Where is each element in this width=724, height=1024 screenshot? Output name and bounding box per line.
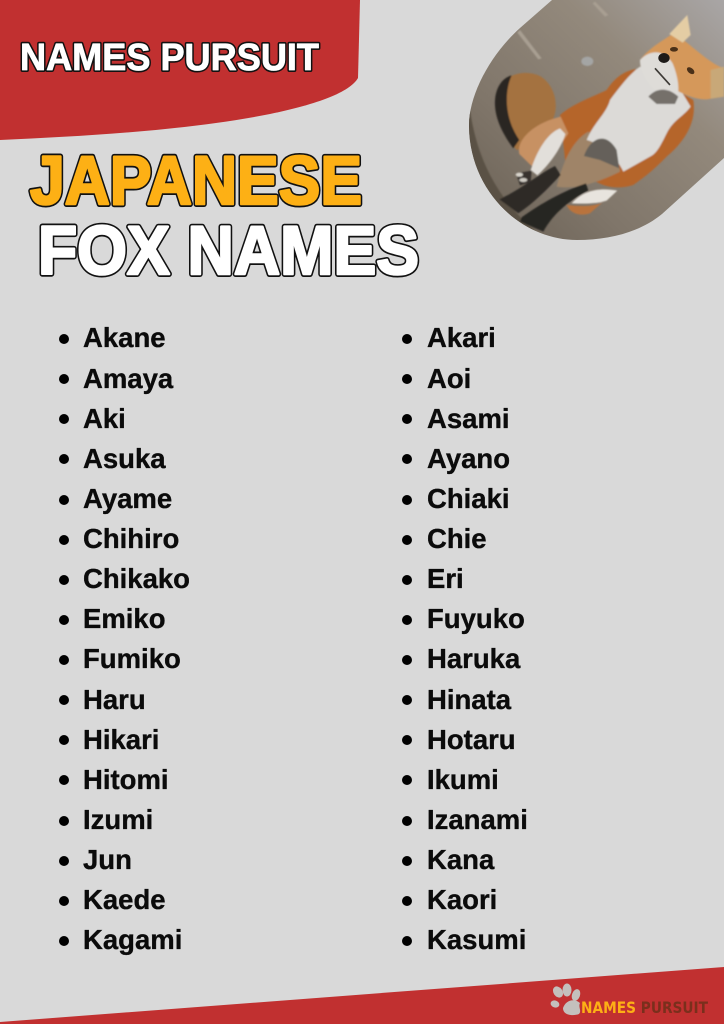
name list: left column: Ayame xyxy=(83,483,172,514)
bottom red band xyxy=(0,967,724,1024)
name list: left column: Amaya xyxy=(83,363,174,394)
name list: right column: Izanami xyxy=(427,804,528,835)
name list: right column: Ayano xyxy=(427,443,510,474)
name list: left column: Izumi xyxy=(83,804,153,835)
icon: paw logo xyxy=(550,984,582,1015)
title: Japanese: JAPANESE xyxy=(30,142,362,219)
name list: left column: Fumiko xyxy=(83,643,181,674)
name list: right column: Eri xyxy=(427,563,464,594)
name list: right column: Hotaru xyxy=(427,724,516,755)
name list: right column: Kaori xyxy=(427,884,497,915)
name list: right column: Haruka xyxy=(427,643,521,674)
name list: right column: Akari xyxy=(427,322,496,353)
name list: left column: Emiko xyxy=(83,603,166,634)
name list: right column: Chie xyxy=(427,523,487,554)
name list: left column: Asuka xyxy=(83,443,166,474)
name list: right column: Ikumi xyxy=(427,764,499,795)
name list: left column xyxy=(59,322,190,955)
name list: right column: Kasumi xyxy=(427,924,526,955)
name list: left column: Haru xyxy=(83,684,146,715)
name list: left column: Kagami xyxy=(83,924,182,955)
name list: right column: Asami xyxy=(427,403,510,434)
name list: left column: Hitomi xyxy=(83,764,169,795)
name list: right column: Kana xyxy=(427,844,495,875)
top-left red banner xyxy=(0,0,360,140)
name list: right column xyxy=(402,322,528,955)
title: Fox Names: FOX NAMES xyxy=(38,212,419,289)
name list: right column: Chiaki xyxy=(427,483,510,514)
name list: left column: Aki xyxy=(83,403,126,434)
fox facial features xyxy=(655,47,696,85)
name list: left column: Chikako xyxy=(83,563,190,594)
name list: left column: Chihiro xyxy=(83,523,179,554)
brand heading: NAMES PURSUIT xyxy=(20,37,319,79)
footer logo text: NAMES PURSUIT xyxy=(581,998,708,1017)
name list: right column: Hinata xyxy=(427,684,512,715)
name list: left column: Kaede xyxy=(83,884,166,915)
title: Japanese: JAPANESE xyxy=(30,142,362,219)
fox photo xyxy=(460,0,724,250)
name list: left column: Akane xyxy=(83,322,166,353)
name list: left column: Jun xyxy=(83,844,132,875)
name list: right column: Aoi xyxy=(427,363,471,394)
brand heading: NAMES PURSUIT xyxy=(20,37,319,79)
name list: right column: Fuyuko xyxy=(427,603,525,634)
title: Fox Names: FOX NAMES xyxy=(38,212,419,289)
name list: left column: Hikari xyxy=(83,724,159,755)
